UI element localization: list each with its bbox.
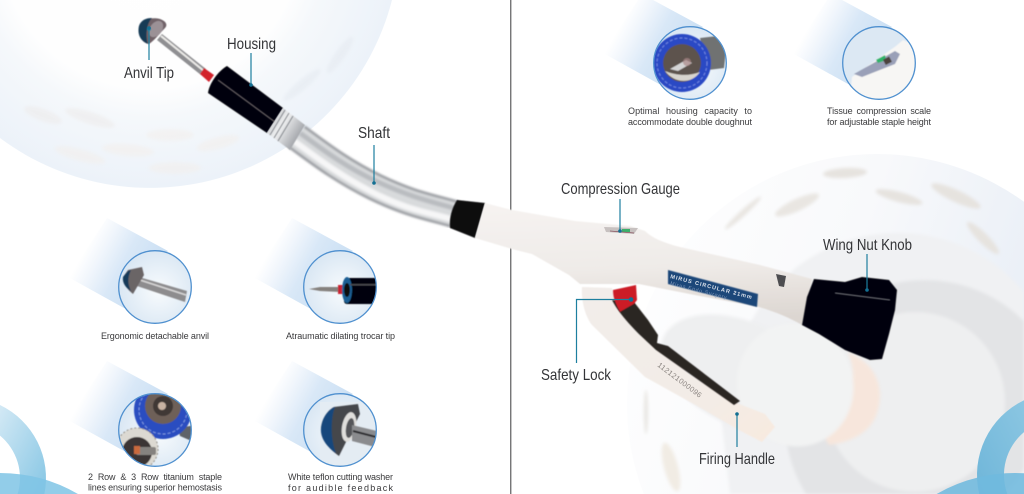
beam [68,361,168,451]
logo mark [776,274,786,287]
center divider [510,0,511,494]
compression gauge [604,227,638,234]
dark slot [612,300,740,405]
product label [668,270,758,307]
background: right stapler ring [627,154,1024,494]
panel: atraumatic dilating trocar tip [253,218,395,341]
caption: Optimal housing capacity to [628,106,752,116]
thumbnail: washer [304,394,377,468]
collar [267,108,305,150]
beam [792,0,892,84]
beam [253,361,353,451]
caption: 2 Row & 3 Row titanium staple [88,472,222,482]
product label: MIRUS CIRCULAR 21mm [669,274,752,301]
panel: white teflon cutting washer [263,364,393,491]
beam [68,218,168,308]
stapler device [138,18,897,442]
caption: Atraumatic dilating trocar tip [286,331,395,341]
serial number: 112121000096 [656,360,704,399]
label: Compression Gauge [561,181,680,233]
panel: tissue compression scale [792,0,931,127]
black band [450,200,485,238]
label: Shaft [358,125,390,185]
caption: White teflon cutting washer [288,472,393,482]
decoration: left blue rings [0,405,78,494]
label: Anvil Tip: Anvil Tip [124,65,174,82]
background: left stapler ring [0,0,392,188]
panel: staple lines [68,361,222,492]
product label: Mirus Endo Surgery [669,281,728,301]
thumbnail: gauge [843,27,916,100]
label: Safety Lock [541,297,633,384]
caption: Tissue compression scale [827,106,931,116]
shaft [294,133,457,219]
label: Wing Nut Knob: Wing Nut Knob [823,237,912,254]
thumbnail: staple rings [120,394,191,466]
beam [253,218,353,308]
handle [582,287,775,442]
label: Anvil Tip [124,26,174,82]
panel: ergonomic detachable anvil [68,218,209,341]
label: Wing Nut Knob [823,237,912,292]
body [475,203,812,325]
label: Firing Handle [699,412,775,468]
label: Housing [227,36,276,87]
thumbnail: anvil [119,251,191,323]
housing [208,66,283,133]
wing nut knob [802,277,897,360]
beam [603,0,703,84]
label: Shaft: Shaft [358,125,390,142]
panel: optimal housing capacity [603,0,752,127]
label: Compression Gauge: Compression Gauge [561,181,680,198]
label: Safety Lock: Safety Lock [541,367,612,384]
panel: optimal housing capacity: accommodate double doughnut [628,117,752,127]
safety lock [613,285,637,312]
thumbnail: trocar [304,251,378,323]
label: Firing Handle: Firing Handle [699,451,775,468]
panel: white teflon cutting washer: for audible feedback [288,483,394,493]
label: Housing: Housing [227,36,276,53]
anvil tip [138,18,214,82]
panel: staple lines: lines ensuring superior hemostasis [88,482,222,492]
thumbnail: housing [653,27,726,99]
panel: tissue compression scale: for adjustable staple height [827,117,931,127]
decoration: right blue rings [937,400,1024,494]
caption: Ergonomic detachable anvil [101,331,209,341]
